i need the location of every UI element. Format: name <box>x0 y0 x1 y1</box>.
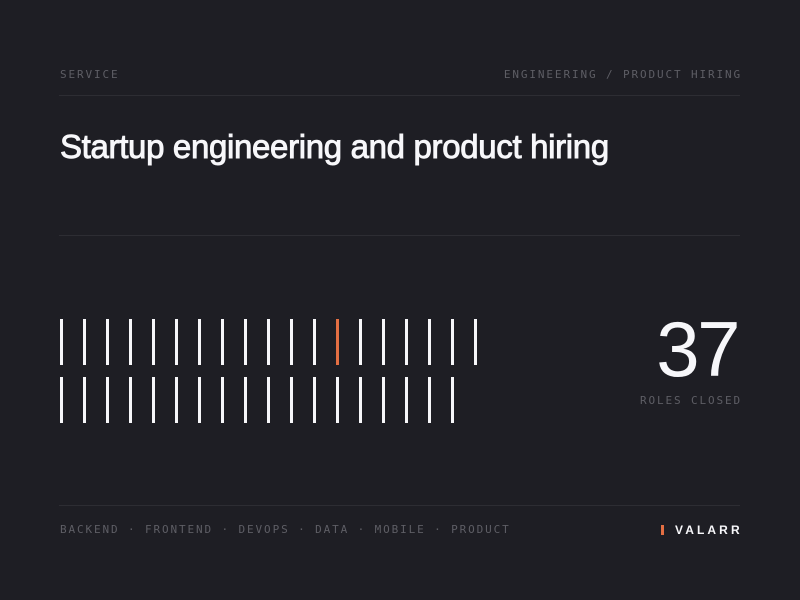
title: Startup engineering and product hiring <box>60 128 609 165</box>
header label: service: SERVICE <box>60 68 120 81</box>
logo accent bar <box>661 525 664 535</box>
big number: 37 <box>656 305 738 393</box>
tally chart: 37 roles <box>60 319 477 423</box>
tally row 1 <box>60 319 477 365</box>
big number caption: ROLES CLOSED <box>640 394 742 407</box>
brand logo <box>661 523 743 537</box>
header label: category: ENGINEERING / PRODUCT HIRING <box>504 68 742 81</box>
footer categories: BACKEND · FRONTEND · DEVOPS · DATA · MOBILE · PRODUCT <box>60 523 511 536</box>
tally row 2 <box>60 377 454 423</box>
logo wordmark: VALARR <box>675 523 743 537</box>
